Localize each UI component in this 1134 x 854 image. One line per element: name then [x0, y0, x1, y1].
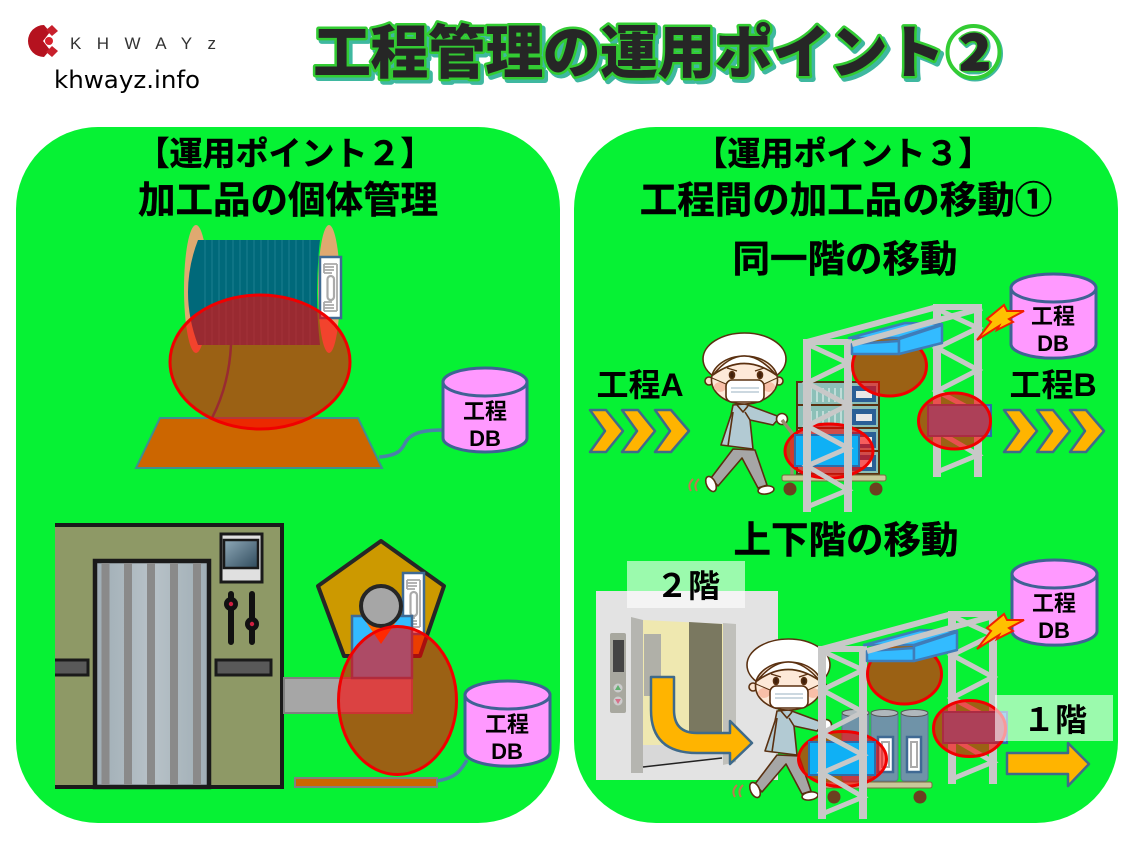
icon: logo mark — [28, 25, 58, 57]
database: 工程DB: DB — [469, 426, 501, 451]
scene: same floor transfer — [689, 304, 991, 512]
diagram: cable reel on reader mat — [136, 225, 443, 468]
arrows: chevrons left — [590, 410, 689, 452]
logo: KHWAYz — [28, 25, 216, 57]
highlight ellipse: cart — [785, 424, 873, 478]
arrow: to first floor — [1007, 743, 1089, 786]
subheading: 同一階の移動: 同一階の移動 — [732, 238, 958, 280]
database: 工程DB: 工程 — [463, 399, 507, 424]
label: 2階 — [627, 561, 745, 608]
reader mat — [136, 418, 382, 468]
operator — [352, 586, 412, 678]
title: 工程管理の運用ポイント — [313, 21, 945, 86]
label: 工程A: 工程A — [596, 367, 684, 403]
reader: side box — [943, 712, 1007, 743]
reader: cart box — [795, 435, 859, 466]
cart with rack — [782, 382, 886, 496]
database: 工程DB — [443, 368, 527, 452]
elevator interior — [631, 617, 736, 773]
subheading: 上下階の移動: 上下階の移動 — [734, 519, 958, 561]
database: 工程DB — [1011, 274, 1096, 358]
label: 工程B: 工程B — [1009, 367, 1097, 403]
reader: side box — [928, 405, 991, 436]
gate frame — [818, 611, 997, 819]
site url: khwayz.info — [54, 66, 200, 94]
highlight ellipse: top — [868, 644, 942, 704]
highlight ellipse: top — [852, 336, 926, 396]
title: ② — [939, 16, 1009, 94]
reader arm — [284, 678, 412, 713]
RFID tag — [320, 257, 341, 318]
slider controls — [224, 594, 259, 642]
near beam — [852, 308, 982, 344]
reader: cart box — [809, 742, 875, 775]
machine door — [95, 561, 209, 787]
machine body — [55, 525, 282, 787]
worker — [733, 639, 832, 801]
logo text: KHWAYz — [70, 34, 216, 53]
gate frame — [803, 304, 982, 512]
reader: top box — [849, 323, 942, 354]
database: 工程DB — [1012, 560, 1097, 645]
scene: floor to floor transfer — [733, 611, 1007, 819]
worker — [689, 333, 788, 495]
highlight ellipse: cart — [798, 732, 886, 786]
label: 1階: １階 — [1023, 702, 1087, 738]
database: 工程DB: 工程 — [1032, 591, 1076, 616]
database: 工程DB: 工程 — [1031, 304, 1075, 329]
highlight ellipse: side — [918, 393, 990, 449]
diagram: machine with robot — [55, 525, 467, 787]
label: 1階 — [995, 695, 1113, 741]
database: 工程DB — [465, 681, 550, 766]
database: 工程DB: DB — [1037, 331, 1069, 356]
heading: 運用ポイント2: 【運用ポイント２】 — [136, 135, 434, 172]
heading: 加工品の個体管理: 加工品の個体管理 — [138, 179, 438, 221]
cart with cylinders — [822, 710, 932, 804]
highlight ellipse: side — [934, 700, 1006, 756]
reader: top box — [864, 630, 957, 661]
database: 工程DB: DB — [1038, 618, 1070, 643]
near beam — [867, 615, 997, 651]
database: 工程DB: DB — [491, 739, 523, 764]
arrow: elevator exit — [651, 677, 752, 764]
title: ② — [940, 18, 1010, 96]
control screen — [221, 534, 262, 582]
RFID tag — [403, 573, 424, 634]
highlight ellipse — [338, 626, 456, 774]
title: 工程管理の運用ポイント — [316, 24, 948, 89]
database: 工程DB: 工程 — [485, 712, 529, 737]
highlight ellipse — [170, 295, 350, 429]
panel: 運用ポイント2 — [16, 127, 560, 823]
cable to database — [437, 760, 467, 781]
elevator button panel — [610, 633, 626, 713]
cable to database — [379, 430, 443, 457]
base bar — [295, 778, 437, 787]
handle bars — [55, 660, 271, 675]
arrows: chevrons right — [1004, 410, 1104, 452]
panel: 運用ポイント3 — [574, 127, 1118, 823]
heading: 運用ポイント3: 【運用ポイント３】 — [694, 135, 992, 172]
label: 2階: ２階 — [656, 568, 720, 604]
heading: 工程間の加工品の移動①: 工程間の加工品の移動① — [640, 179, 1052, 221]
icon: wireless bolt — [977, 305, 1024, 340]
reel — [184, 225, 340, 418]
pentagon workstation — [318, 541, 444, 656]
icon: wireless bolt — [977, 614, 1024, 649]
scene: elevator — [596, 591, 778, 780]
